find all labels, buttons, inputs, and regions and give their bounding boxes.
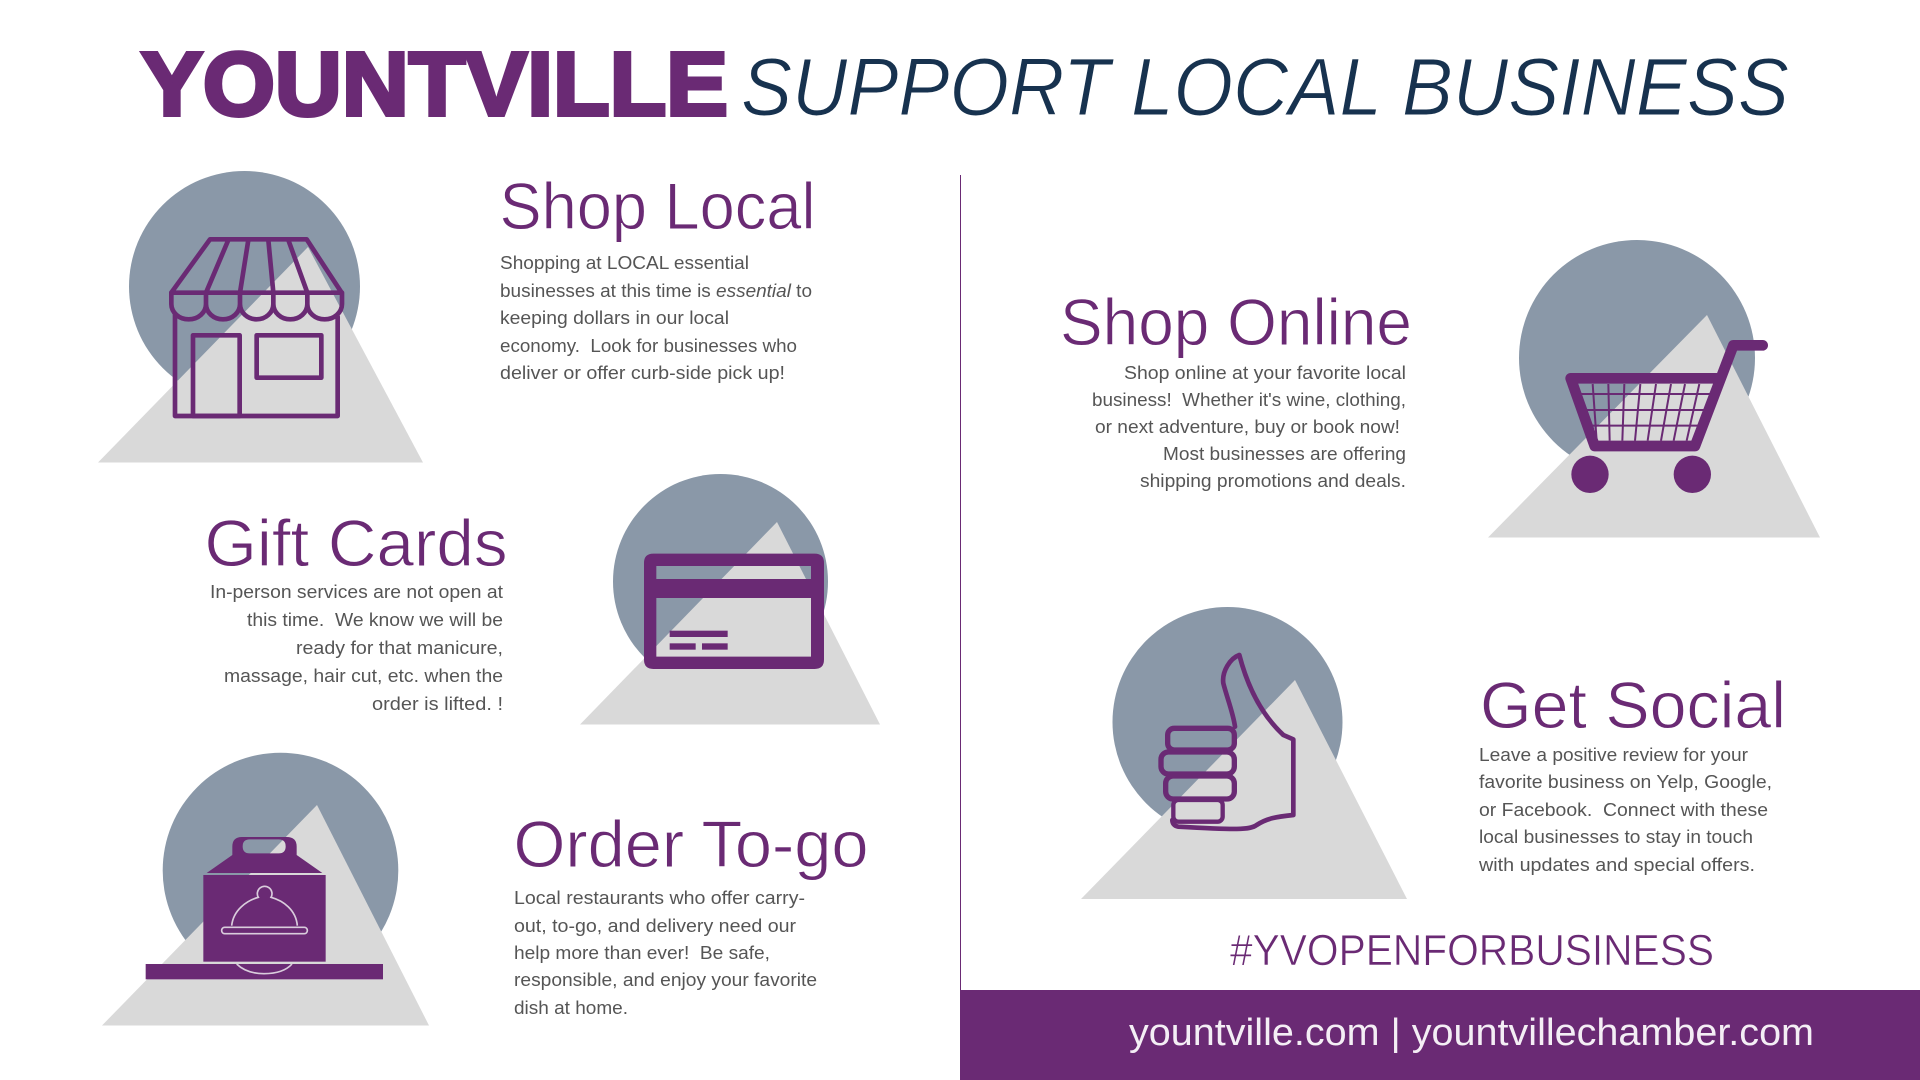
text block: massage, hair cut, etc. when the bbox=[224, 666, 503, 686]
text block: or next adventure, buy or book now! bbox=[1095, 417, 1400, 437]
heading: Gift Cards bbox=[204, 506, 508, 580]
text block bbox=[500, 253, 812, 383]
panel: shop online bbox=[1060, 240, 1820, 538]
title: YOUNTVILLE bbox=[141, 35, 728, 135]
text block: this time. We know we will be bbox=[247, 610, 503, 630]
text block: Local restaurants who offer carry- bbox=[514, 888, 805, 908]
text block: responsible, and enjoy your favorite bbox=[514, 970, 817, 990]
footer band bbox=[960, 990, 1920, 1080]
text block: order is lifted. ! bbox=[372, 694, 503, 714]
text block: In-person services are not open at bbox=[210, 582, 503, 602]
footer band: yountville.com | yountvillechamber.com bbox=[1129, 1012, 1814, 1054]
icon: shopping cart bbox=[1488, 240, 1820, 538]
icon: takeout box bbox=[102, 753, 429, 1026]
hashtag: #YVOPENFORBUSINESS bbox=[1230, 926, 1714, 975]
text block: out, to-go, and delivery need our bbox=[514, 916, 796, 936]
panel: gift cards bbox=[204, 474, 880, 724]
heading: Shop Online bbox=[1060, 285, 1412, 359]
icon: credit card bbox=[580, 474, 880, 724]
text block: local businesses to stay in touch bbox=[1479, 827, 1753, 847]
text block: Shopping at LOCAL essential bbox=[500, 253, 749, 273]
text block: favorite business on Yelp, Google, bbox=[1479, 772, 1772, 792]
icon: storefront bbox=[98, 171, 423, 462]
panel: get social bbox=[1081, 607, 1786, 899]
text block: Shop online at your favorite local bbox=[1124, 363, 1406, 383]
text block: Leave a positive review for your bbox=[1479, 745, 1748, 765]
text block: help more than ever! Be safe, bbox=[514, 943, 770, 963]
text block bbox=[514, 888, 817, 1018]
text block: economy. Look for businesses who bbox=[500, 336, 797, 356]
text block: with updates and special offers. bbox=[1478, 855, 1755, 875]
text block: Most businesses are offering bbox=[1163, 444, 1406, 464]
title bbox=[141, 35, 1789, 135]
icon: thumbs up bbox=[1081, 607, 1407, 899]
text block: or Facebook. Connect with these bbox=[1479, 800, 1768, 820]
text block bbox=[1092, 363, 1406, 491]
text block: shipping promotions and deals. bbox=[1140, 471, 1406, 491]
heading: Order To-go bbox=[514, 807, 868, 881]
text block: business! Whether it's wine, clothing, bbox=[1092, 390, 1406, 410]
panel: order to-go bbox=[102, 753, 868, 1026]
text block: businesses at this time is essential to bbox=[500, 281, 812, 301]
panel: shop local bbox=[98, 169, 816, 462]
heading: Get Social bbox=[1480, 668, 1786, 742]
text block bbox=[210, 582, 503, 714]
text block bbox=[1478, 745, 1772, 875]
heading: Shop Local bbox=[500, 169, 816, 243]
text block: ready for that manicure, bbox=[296, 638, 503, 658]
title: SUPPORT LOCAL BUSINESS bbox=[741, 42, 1789, 133]
text block: keeping dollars in our local bbox=[500, 308, 729, 328]
text block: deliver or offer curb-side pick up! bbox=[500, 363, 785, 383]
text block: dish at home. bbox=[514, 998, 628, 1018]
